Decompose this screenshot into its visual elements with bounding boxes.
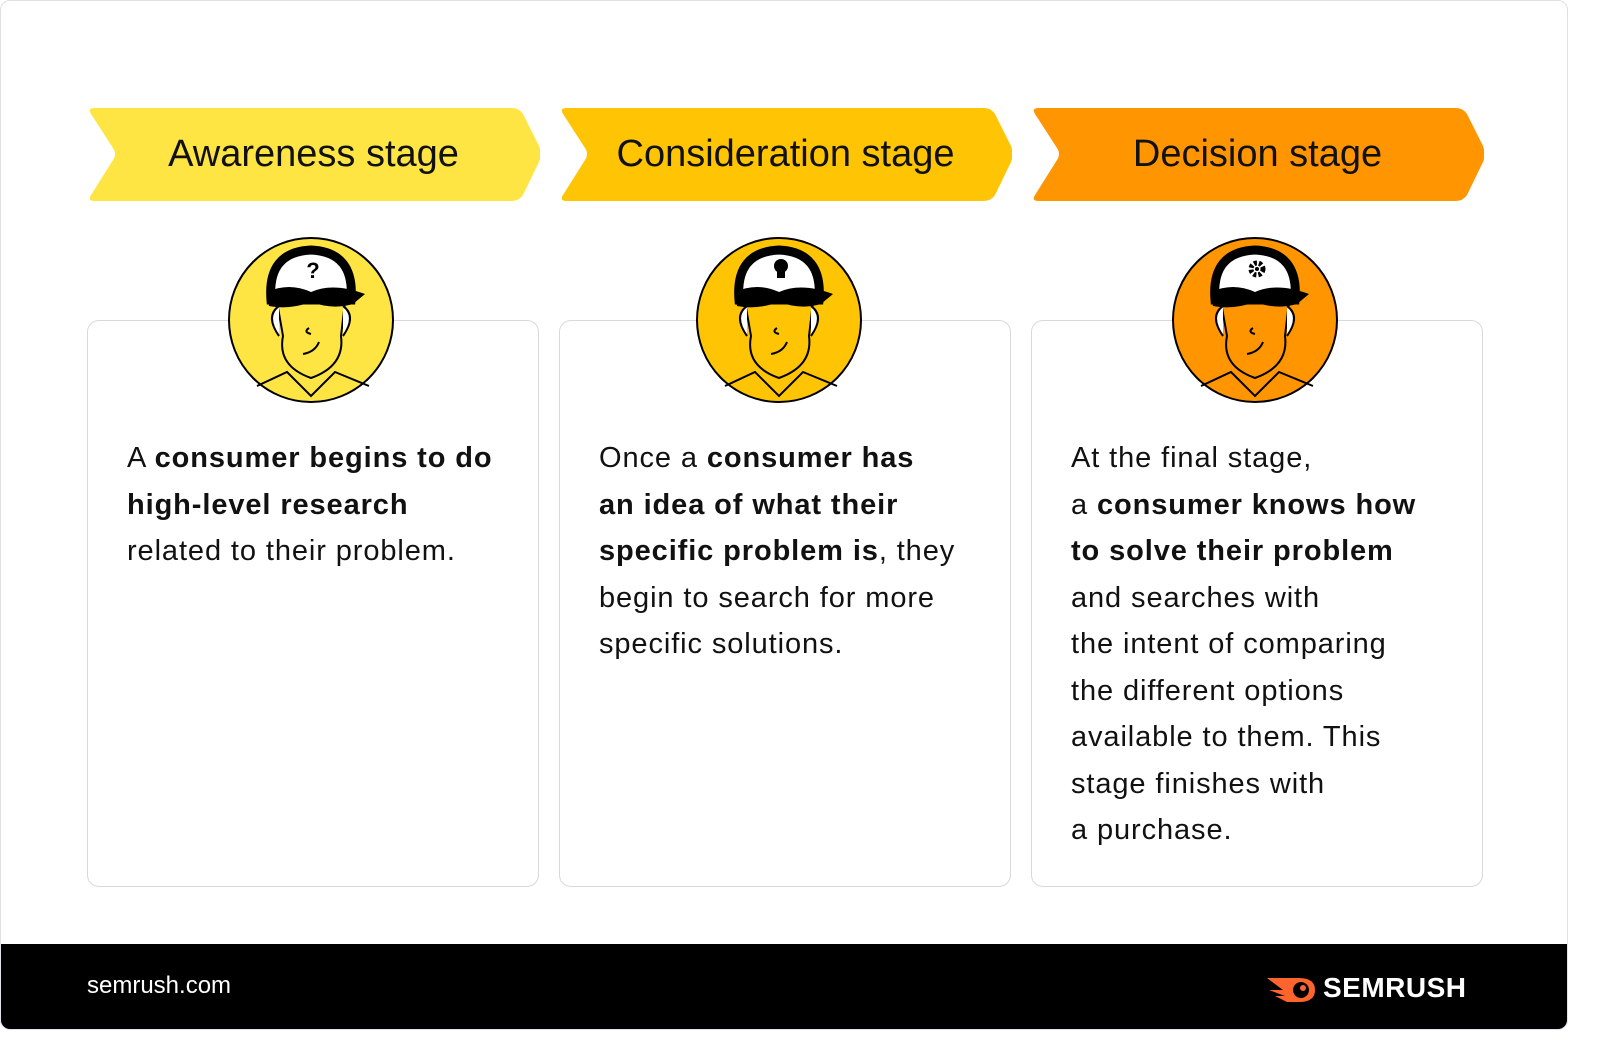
card: awareness xyxy=(87,320,539,887)
card: decision: and searches with xyxy=(1071,582,1320,614)
card: decision: to solve their problem xyxy=(1071,535,1394,567)
card: decision: available to them. This xyxy=(1071,721,1381,753)
logo: semrush: SEMRUSH xyxy=(1323,972,1467,1003)
card: decision: a purchase. xyxy=(1071,814,1232,846)
banner: consideration: Consideration stage xyxy=(616,133,954,175)
footer url: semrush.com xyxy=(87,972,231,999)
banner: awareness: Awareness stage xyxy=(168,133,459,175)
icon: avatar gear xyxy=(1172,237,1338,403)
card: decision xyxy=(1031,320,1483,887)
card: consideration: specific solutions. xyxy=(599,628,843,660)
card: decision: stage finishes with xyxy=(1071,768,1325,800)
icon: avatar question: ? xyxy=(306,258,320,283)
icon: avatar lightbulb xyxy=(696,237,862,403)
card: awareness: high-level research xyxy=(127,488,408,520)
card: consideration: begin to search for more xyxy=(599,582,935,614)
card: awareness: A consumer begins to do xyxy=(127,442,493,474)
card: decision: a consumer knows how xyxy=(1071,488,1416,520)
card: awareness: related to their problem. xyxy=(127,535,456,567)
footer xyxy=(1,944,1569,1030)
banner: consideration xyxy=(562,108,1012,201)
card: decision: At the final stage, xyxy=(1071,442,1312,474)
card: consideration: Once a consumer has xyxy=(599,442,914,474)
banner: decision xyxy=(1034,108,1484,201)
card: consideration: specific problem is, they xyxy=(599,535,955,567)
card: decision: the intent of comparing xyxy=(1071,628,1387,660)
card: consideration xyxy=(559,320,1011,887)
card: consideration: an idea of what their xyxy=(599,488,898,520)
banner: awareness xyxy=(90,108,540,201)
card: decision: the different options xyxy=(1071,674,1344,706)
banner: decision: Decision stage xyxy=(1133,133,1382,175)
icon: avatar question xyxy=(228,237,394,403)
